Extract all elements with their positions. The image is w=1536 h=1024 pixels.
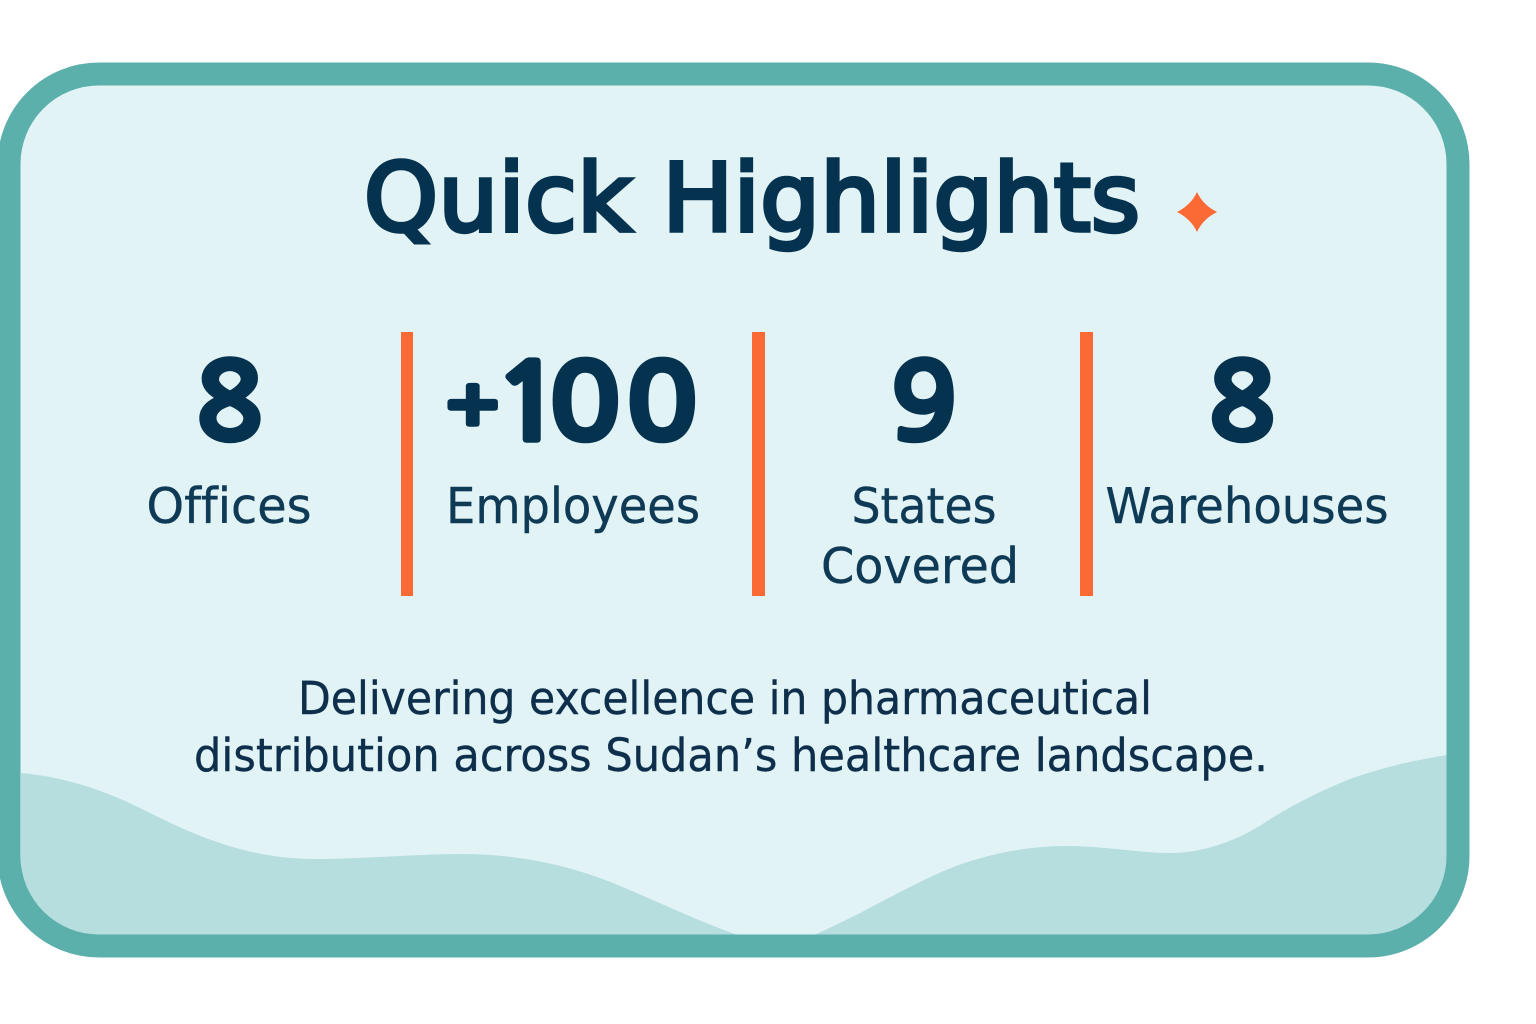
stat: warehouses: Warehouses [1106,478,1388,535]
divider: second [752,332,765,596]
stat: warehouses: 8 [1208,352,1276,457]
stat: warehouses [1106,352,1388,535]
title: Quick Highlights [364,144,1140,254]
stat: states covered: Covered [821,538,1019,595]
stat: offices [146,352,312,535]
stat: offices: 8 [196,352,263,457]
stat: employees: Employees [446,478,700,535]
stat: employees [446,350,700,535]
stat: employees: + [446,371,499,443]
stat: offices: Offices [146,478,312,535]
stat: states covered [821,352,1019,595]
wave: left [21,773,738,935]
stat: states covered: States [852,478,996,535]
divider: third [1080,332,1093,596]
divider: first [401,332,413,596]
wave: right [814,755,1447,935]
icon: orange sparkle [1177,192,1217,232]
stat: states covered: 9 [890,352,958,457]
tagline [194,672,1268,782]
stat: employees: 100 [492,350,699,456]
tagline: distribution across Sudan’s healthcare landscape. [194,729,1268,782]
tagline: Delivering excellence in pharmaceutical [298,672,1152,725]
